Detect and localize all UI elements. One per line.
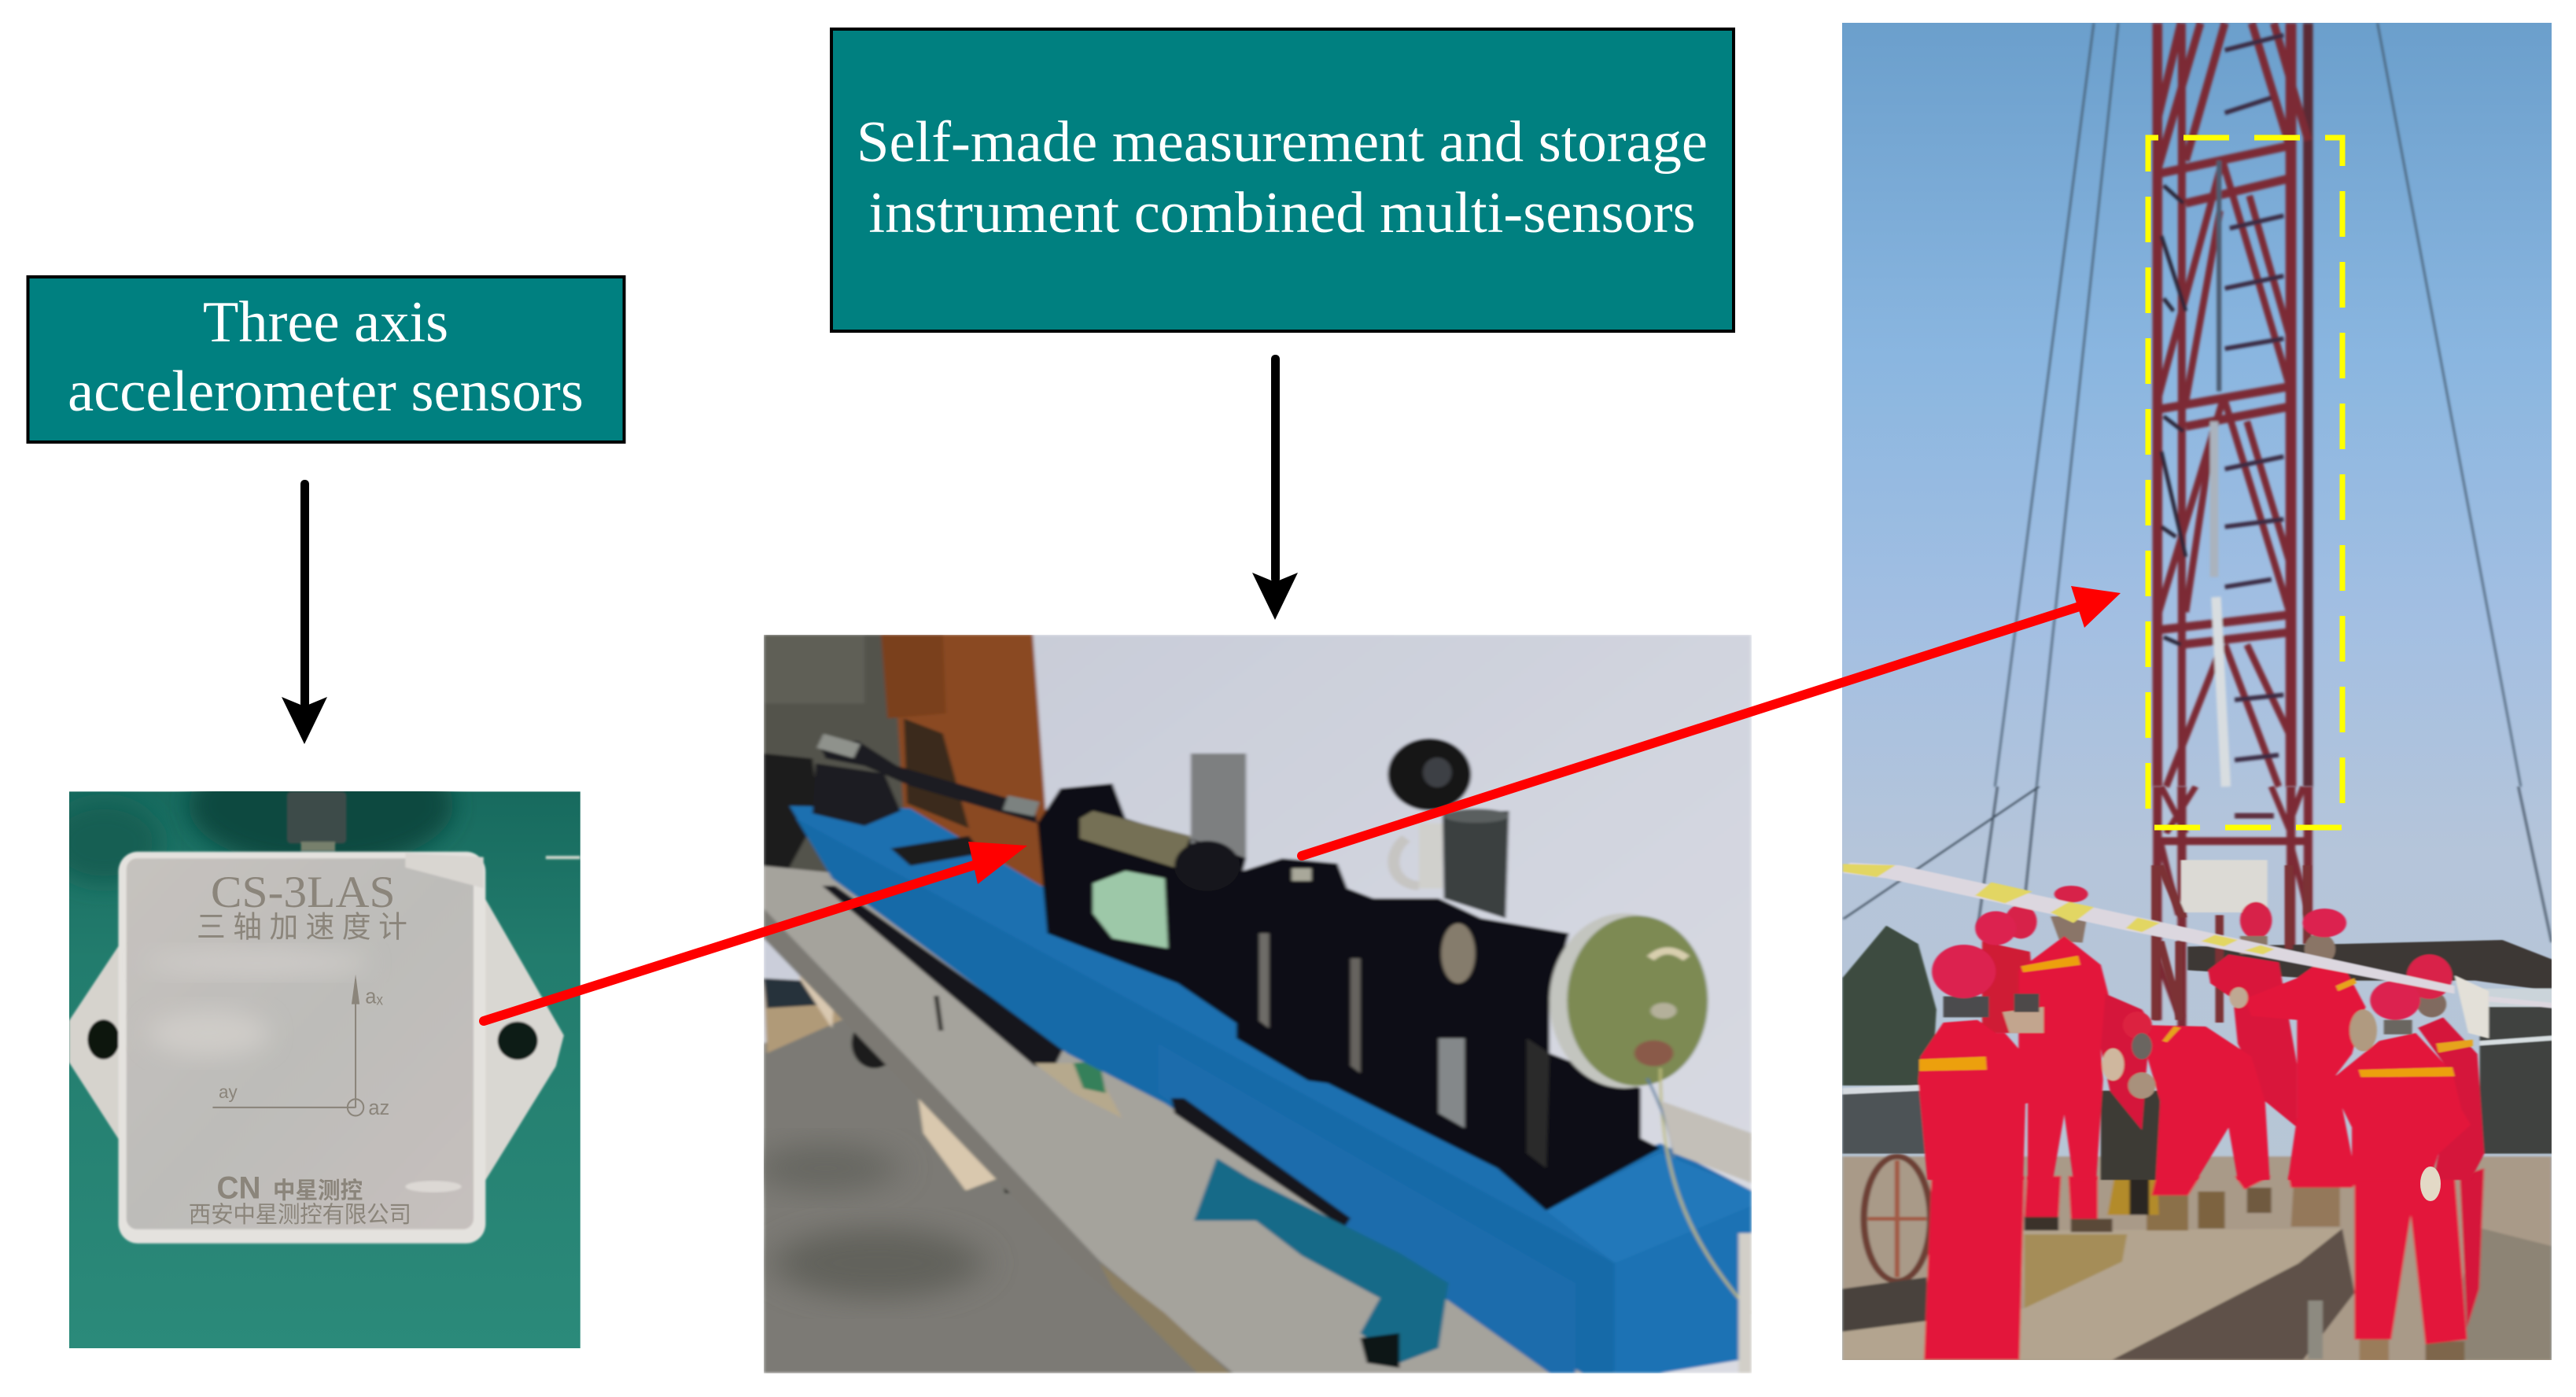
black arrow: label to instrument photo <box>1252 355 1298 620</box>
red arrow: accelerometer into instrument <box>484 842 1027 1021</box>
yellow dashed marker rectangle <box>2148 138 2342 828</box>
machine details <box>1191 754 1246 858</box>
blue beam <box>790 806 1752 1373</box>
machine silhouette and bedplates <box>1037 783 1660 1211</box>
guy wires lower <box>1844 787 2552 942</box>
rear bent worker <box>2101 993 2151 1130</box>
photo: drop-test instrument bench <box>754 635 1752 1373</box>
photo: derrick and crew <box>1842 23 2552 1363</box>
warning sign <box>2180 860 2268 912</box>
label box: three axis accelerometer sensors: Three axis <box>203 290 448 355</box>
sensor engraved markings: CS-3LAS <box>211 868 396 917</box>
red arrow: instrument into derrick <box>1302 586 2121 856</box>
lead wires <box>1657 1067 1741 1300</box>
shed roof and right backdrop <box>2187 940 2552 991</box>
coverall legs <box>1924 1168 2484 1360</box>
pulley and pipe standing on the wall side <box>1388 739 1471 810</box>
wellhead yellow stand <box>2107 1135 2159 1215</box>
black tube on bench <box>822 886 1063 1068</box>
upright worker holding the tool <box>2208 902 2297 1127</box>
sensor engraved markings: az <box>368 1097 389 1119</box>
label box: self-made measurement and storage instrument: Self-made measurement and storage <box>857 110 1708 175</box>
device mounting ears <box>69 892 564 1187</box>
white box on tape <box>2455 975 2489 1038</box>
handwheel <box>1864 1156 1930 1281</box>
derrick, ground and lower crew <box>1842 787 2552 1363</box>
sensor engraved markings: 中星测控 <box>273 1172 363 1205</box>
wooden cabinet <box>895 635 1049 888</box>
label box: three axis accelerometer sensors <box>28 277 625 442</box>
photo: accelerometer sensor <box>48 743 580 1349</box>
logging tool string <box>2215 160 2223 391</box>
sky <box>1842 23 2552 1360</box>
glove on near right worker <box>2420 1167 2441 1201</box>
bent worker <box>2123 1012 2270 1180</box>
left fence band <box>1842 1091 1929 1154</box>
label box: self-made measurement and storage instrument: instrument combined multi-sensors <box>868 181 1696 245</box>
label box: self-made measurement and storage instrument <box>831 29 1734 331</box>
near left worker with phone <box>1918 945 2048 1180</box>
sensor engraved markings: 西安中星测控有限公司 <box>189 1196 411 1229</box>
upper crew and background <box>1842 860 2552 1180</box>
back-row workers <box>1975 886 2088 1033</box>
far right worker <box>2407 954 2484 1180</box>
olive drum <box>1546 912 1639 1091</box>
bench legs <box>798 975 835 1029</box>
wall <box>764 635 1752 1373</box>
barrier tape <box>1843 863 2552 1008</box>
sensor engraved markings: CN <box>217 1170 261 1205</box>
ground <box>1842 1156 2552 1363</box>
sensor engraved markings: aₓ <box>365 986 383 1008</box>
dark room corner <box>764 635 1047 889</box>
label box: three axis accelerometer sensors: accelerometer sensors <box>68 359 584 424</box>
dark gap behind crew <box>2101 1091 2160 1180</box>
far-end fixture and shaft <box>819 741 1037 824</box>
derrick legs by the crew <box>2155 865 2307 1023</box>
derrick lower section <box>2158 787 2308 1028</box>
distant tree <box>1842 926 1937 1086</box>
tall worker gripping the tool <box>2230 909 2365 1180</box>
sensor engraved markings: 三轴加速度计 <box>197 903 407 945</box>
concrete bench <box>764 866 1589 1373</box>
boots <box>2025 1217 2058 1230</box>
black arrow: label to accelerometer photo <box>282 480 327 744</box>
guy wires <box>1995 23 2521 787</box>
hydraulic jack <box>1171 1098 1351 1228</box>
standing worker <box>2018 936 2119 1180</box>
near right worker <box>2331 981 2471 1180</box>
floor <box>764 1018 1199 1373</box>
derrick tower upper <box>2158 23 2308 787</box>
concrete platform <box>1842 1229 2342 1360</box>
sensor engraved markings <box>189 868 411 1229</box>
sensor engraved markings: ay <box>219 1081 238 1102</box>
